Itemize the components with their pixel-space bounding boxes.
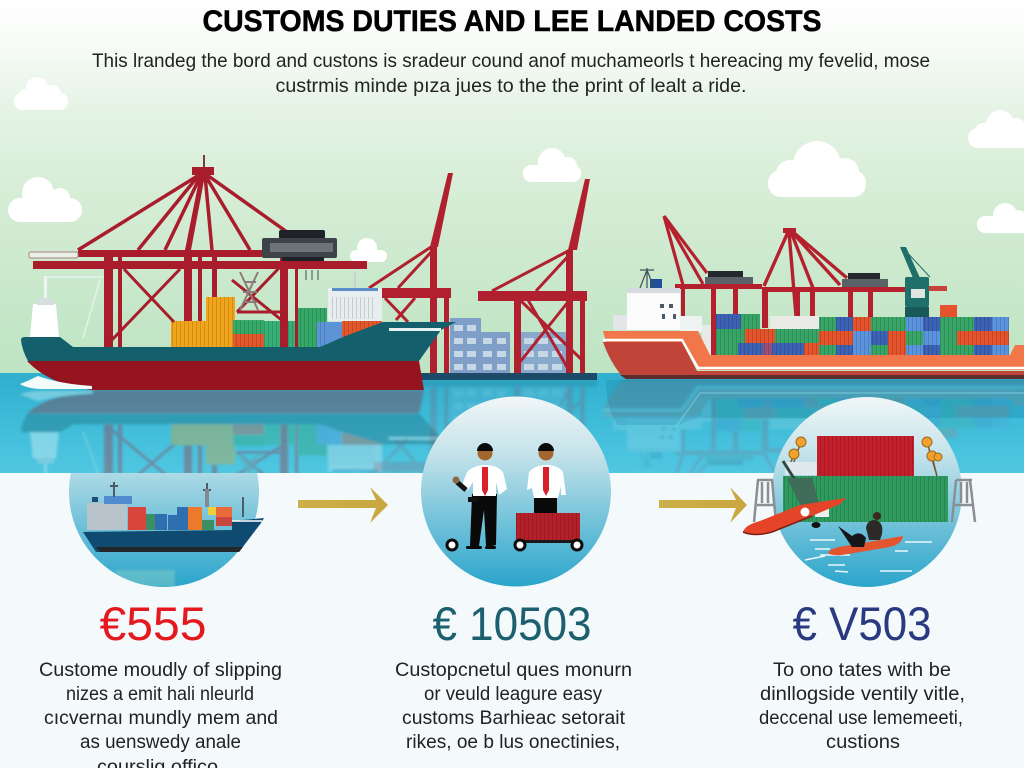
ship hull [83, 518, 264, 552]
value 3: € V503 [792, 597, 932, 650]
water reflections [20, 379, 1024, 473]
red cart [515, 513, 582, 550]
large ship and gantry crane [20, 155, 456, 390]
reflection: right ship [603, 379, 1024, 473]
lower panel [0, 473, 1024, 768]
description 2 [395, 660, 632, 753]
description 1: as uenswedy anale [80, 732, 241, 753]
description 2: rikes, oe b lus onectinies, [406, 732, 620, 753]
trolleys [708, 271, 743, 277]
hull upper [21, 322, 456, 361]
hull stripe [389, 328, 441, 331]
water ripples [805, 540, 932, 572]
crane 1 [369, 173, 453, 373]
quay platform [421, 373, 597, 380]
gantry crane [29, 155, 367, 347]
white tower [30, 276, 103, 338]
green container [783, 476, 948, 522]
sky background [0, 0, 1024, 375]
description 2: or veuld leagure easy [424, 684, 602, 705]
description 2: customs Barhieac setorait [402, 708, 626, 729]
title: CUSTOMS DUTIES AND LEE LANDED COSTS [202, 5, 822, 38]
ship superstructure [87, 503, 127, 530]
description 3: custions [826, 732, 900, 753]
value 1: €555 [100, 597, 206, 650]
containers back row [716, 314, 819, 357]
description 3: To ono tates with be [773, 660, 951, 681]
stools [754, 480, 975, 522]
machine [783, 461, 829, 517]
lamps [788, 437, 942, 476]
right ship and cranes [603, 216, 1024, 379]
description 3 [759, 660, 965, 753]
hull red [603, 342, 1024, 376]
large red kayak [743, 498, 846, 535]
hull white stripe [603, 340, 1024, 368]
containers main stack [819, 305, 1009, 357]
arrow 1 [298, 487, 388, 523]
intro text: custrmis minde pıza jues to the the print of lealt a ride. [276, 75, 746, 97]
trolley [262, 230, 337, 261]
officer 1 [447, 443, 507, 550]
water [0, 373, 1024, 473]
arrow 2 [659, 487, 747, 523]
reflection: right stripe [675, 393, 1024, 428]
step 1: ship badge [69, 473, 264, 587]
description 3: deccenal use lememeeti, [759, 708, 963, 729]
intro text: This lrandeg the bord and custons is sradeur cound anof muchameorls t hereacing my fevelid, mose [92, 50, 930, 72]
superstructure [328, 272, 382, 321]
description 1: nizes a emit hali nleurld [66, 684, 254, 705]
step 2: customs officers badge [421, 396, 611, 586]
superstructure [613, 268, 711, 355]
bow wave [20, 376, 92, 389]
reflection [115, 570, 175, 587]
hull keel [620, 375, 1024, 379]
cranes on right ship [664, 216, 947, 328]
intro text [92, 50, 930, 97]
crane 2 [478, 179, 590, 373]
step 3: containers and kayaks badge [743, 397, 975, 587]
hull deck [603, 331, 1024, 370]
quay with cranes and buildings [369, 173, 597, 380]
port buildings [450, 318, 566, 373]
circle [772, 397, 962, 587]
value 2: € 10503 [432, 597, 592, 650]
red container [817, 436, 914, 476]
reflection: quay [368, 380, 597, 473]
officer 2 [527, 443, 566, 514]
description 1: cıcvernaı mundly mem and [44, 708, 278, 729]
hull lower [27, 361, 424, 390]
clouds [8, 77, 1024, 262]
description 1 [39, 660, 282, 768]
crane leg in front of containers [711, 289, 716, 355]
circle [421, 396, 611, 586]
green crane [900, 247, 947, 317]
description 1: Custome moudly of slipping [39, 660, 282, 681]
lattice tower [240, 272, 258, 310]
reflection: large ship [20, 390, 440, 473]
description 2: Custopcnetul ques monurn [395, 660, 632, 681]
description 3: dinllogside ventily vitle, [760, 684, 965, 705]
reflection: right hull band [606, 380, 1024, 425]
small kayak with paddlers [828, 512, 903, 555]
containers [171, 297, 382, 347]
circle [69, 473, 259, 587]
ship containers [128, 507, 146, 530]
